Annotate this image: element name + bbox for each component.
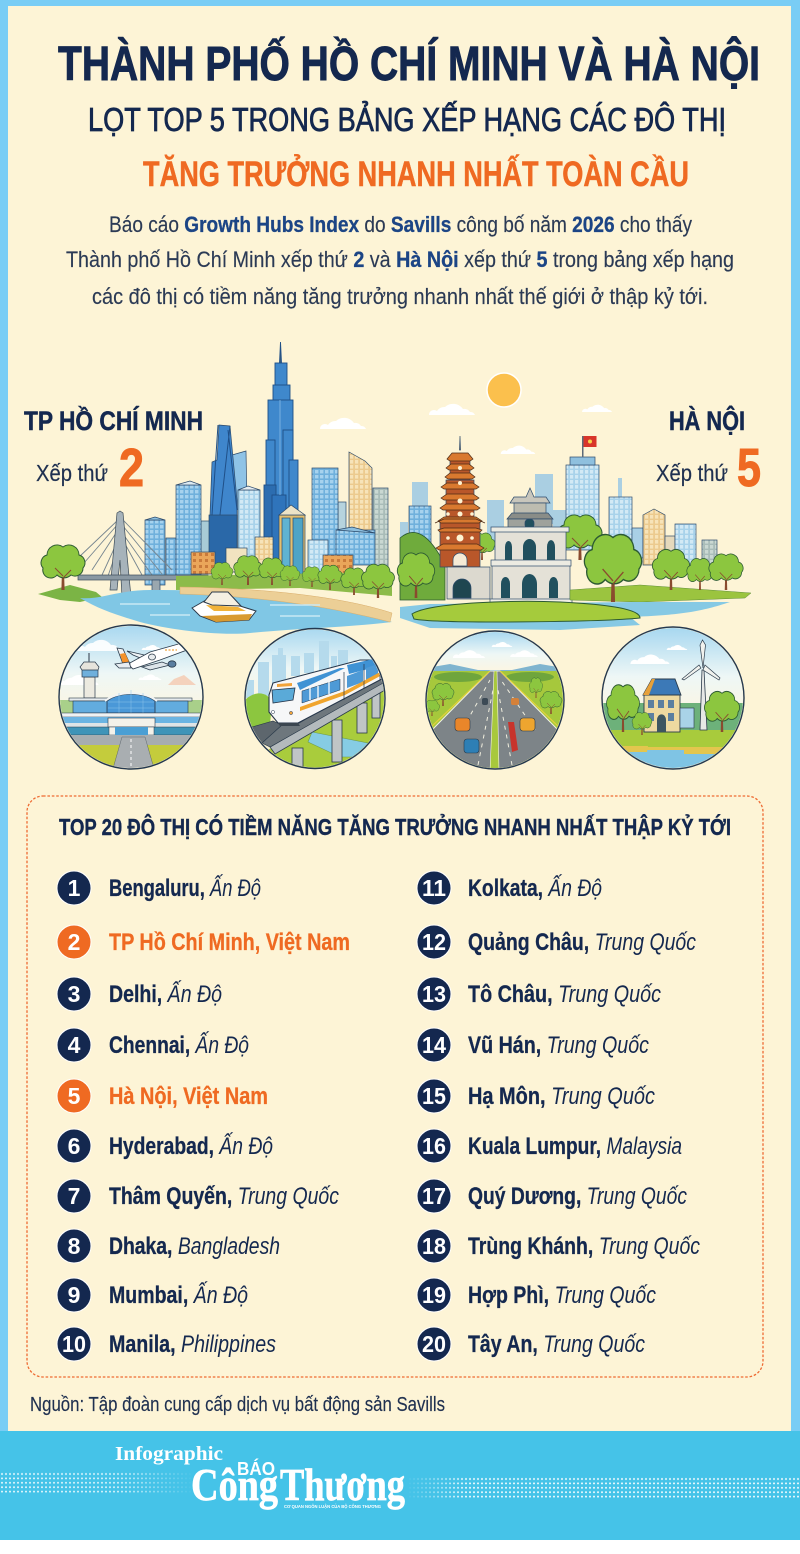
intro paragraph (66, 212, 734, 309)
rank 1 (57, 871, 261, 905)
rank 1: Bengaluru, Ấn Độ (109, 874, 261, 902)
rank 10: Manila, Philippines (109, 1331, 276, 1358)
rank 6 (57, 1129, 273, 1163)
rank 9 (57, 1278, 248, 1312)
right buildings (609, 497, 632, 552)
rank 8: 8 (68, 1233, 81, 1259)
rank 14: 14 (422, 1032, 446, 1058)
rank 15: Hạ Môn, Trung Quốc (468, 1083, 655, 1110)
label: TP Ho Chi Minh rank (24, 405, 203, 498)
gold framed tower (279, 515, 305, 578)
label: TP Ho Chi Minh rank: Xếp thứ (36, 460, 108, 486)
newspaper logo (191, 1458, 405, 1510)
terminal (69, 698, 192, 701)
tower (84, 677, 95, 698)
rank 18 (417, 1229, 700, 1263)
rank 11: 11 (422, 875, 446, 901)
rank 5 (57, 1079, 268, 1113)
intro paragraph: Báo cáo Growth Hubs Index do Savills công bố năm 2026 cho thấy (109, 212, 692, 237)
rank 17 (417, 1179, 687, 1213)
rank 4: 4 (68, 1032, 81, 1058)
label: Ha Noi rank: HÀ NỘI (669, 405, 745, 436)
rank 12 (417, 925, 696, 959)
newspaper logo: CƠ QUAN NGÔN LUẬN CỦA BỘ CÔNG THƯƠNG (284, 1502, 381, 1509)
rank 20: Tây An, Trung Quốc (468, 1331, 645, 1358)
clouds (429, 404, 612, 454)
rank 1: 1 (68, 875, 81, 901)
cable bridge (78, 520, 172, 576)
newspaper logo: Công (191, 1459, 278, 1510)
footer band (0, 1431, 800, 1540)
roadside trees (432, 684, 454, 706)
rank 9: 9 (68, 1282, 80, 1308)
rank 3: Delhi, Ấn Độ (109, 980, 222, 1008)
road (430, 671, 560, 772)
apron and road (71, 735, 191, 745)
rank 12: 12 (422, 929, 446, 955)
label: Ha Noi rank: Xếp thứ (656, 460, 728, 486)
rank 9: Mumbai, Ấn Độ (109, 1281, 248, 1309)
rank 19: Hợp Phì, Trung Quốc (468, 1282, 656, 1309)
rank 18: Trùng Khánh, Trung Quốc (468, 1233, 700, 1260)
pale back buildings (400, 474, 622, 552)
rank 12: Quảng Châu, Trung Quốc (468, 929, 696, 956)
rank 13: Tô Châu, Trung Quốc (468, 981, 661, 1008)
icon: airport (57, 624, 203, 772)
rank 17: 17 (422, 1183, 446, 1209)
rank 6: Hyderabad, Ấn Độ (109, 1132, 273, 1160)
rank 11: Kolkata, Ấn Độ (468, 874, 602, 902)
Landmark 81 tower (264, 342, 298, 575)
trees left (397, 515, 602, 600)
footer label: Infographic (115, 1443, 223, 1465)
rank 11 (417, 871, 602, 905)
pagoda (435, 436, 490, 599)
rank 19: 19 (422, 1282, 446, 1308)
rank 2: TP Hồ Chí Minh, Việt Nam (109, 929, 350, 956)
rank 3: 3 (68, 981, 80, 1007)
trees right (570, 534, 751, 602)
train body (269, 660, 395, 723)
intro paragraph: các đô thị có tiềm năng tăng trưởng nhanh nhất thế giới ở thập kỷ tới. (92, 284, 708, 309)
boat (192, 592, 256, 622)
rank 19 (417, 1278, 656, 1312)
icon: metro train (245, 627, 395, 772)
illustration: Ho Chi Minh City skyline (38, 342, 394, 634)
rank 8 (57, 1229, 280, 1263)
river (80, 590, 392, 634)
intro paragraph: Thành phố Hồ Chí Minh xếp thứ 2 và Hà Nội xếp thứ 5 trong bảng xếp hạng (66, 247, 734, 272)
rank 7: Thâm Quyến, Trung Quốc (109, 1183, 339, 1210)
sun (487, 373, 521, 407)
lake and island (400, 602, 730, 630)
label: Ha Noi rank (656, 405, 761, 498)
rank 4 (57, 1028, 249, 1062)
label: TP Ho Chi Minh rank: 2 (119, 438, 144, 498)
cars (455, 718, 470, 731)
rank 7: 7 (68, 1183, 80, 1209)
illustration: Ha Noi skyline (397, 373, 751, 630)
icon: expressway (424, 631, 564, 772)
rank 2: 2 (68, 929, 80, 955)
source note: Nguồn: Tập đoàn cung cấp dịch vụ bất động sản Savills (30, 1394, 445, 1416)
rank 18: 18 (422, 1233, 446, 1259)
rank 20: 20 (422, 1331, 446, 1357)
ground with tree (38, 585, 102, 602)
icon: green house and wind turbine (602, 627, 744, 772)
label: Ha Noi rank: 5 (737, 438, 761, 498)
rank 14: Vũ Hán, Trung Quốc (468, 1032, 649, 1059)
house (644, 695, 680, 732)
rank 15: 15 (422, 1083, 446, 1109)
wind turbine (700, 670, 707, 730)
rank 5: Hà Nội, Việt Nam (109, 1083, 268, 1110)
rank 16: Kuala Lumpur, Malaysia (468, 1133, 682, 1160)
rank 4: Chennai, Ấn Độ (109, 1031, 249, 1059)
rank 16: 16 (422, 1133, 446, 1159)
low-rise buildings (255, 537, 273, 573)
title (58, 36, 760, 194)
pillars (292, 693, 380, 772)
rank 14 (417, 1028, 649, 1062)
rank 17: Quý Dương, Trung Quốc (468, 1183, 687, 1210)
trees (607, 685, 639, 732)
newspaper logo: Thương (280, 1459, 405, 1510)
mid buildings (238, 490, 260, 565)
back pale buildings (338, 502, 346, 542)
rank 6: 6 (68, 1133, 80, 1159)
rank 5: 5 (68, 1083, 81, 1109)
label: TP Ho Chi Minh rank: TP HỒ CHÍ MINH (24, 405, 203, 436)
tall building with flag (566, 436, 599, 550)
rank 2 (57, 925, 350, 959)
rank 16 (417, 1129, 682, 1163)
rank 7 (57, 1179, 339, 1213)
rank 3 (57, 977, 222, 1011)
viaduct (270, 682, 385, 754)
rank 15 (417, 1079, 655, 1113)
row of trees (176, 556, 394, 598)
panel: top 20 ranking (27, 796, 763, 1377)
rank 10: 10 (62, 1331, 86, 1357)
rank 20 (417, 1327, 645, 1361)
Turtle Tower (490, 488, 572, 603)
newspaper logo: BÁO (237, 1458, 275, 1479)
plane (115, 643, 190, 670)
rank 13 (417, 977, 661, 1011)
rank 13: 13 (422, 981, 446, 1007)
rank 8: Dhaka, Bangladesh (109, 1233, 280, 1260)
Bitexco tower (209, 425, 247, 566)
rank 10 (57, 1327, 276, 1361)
